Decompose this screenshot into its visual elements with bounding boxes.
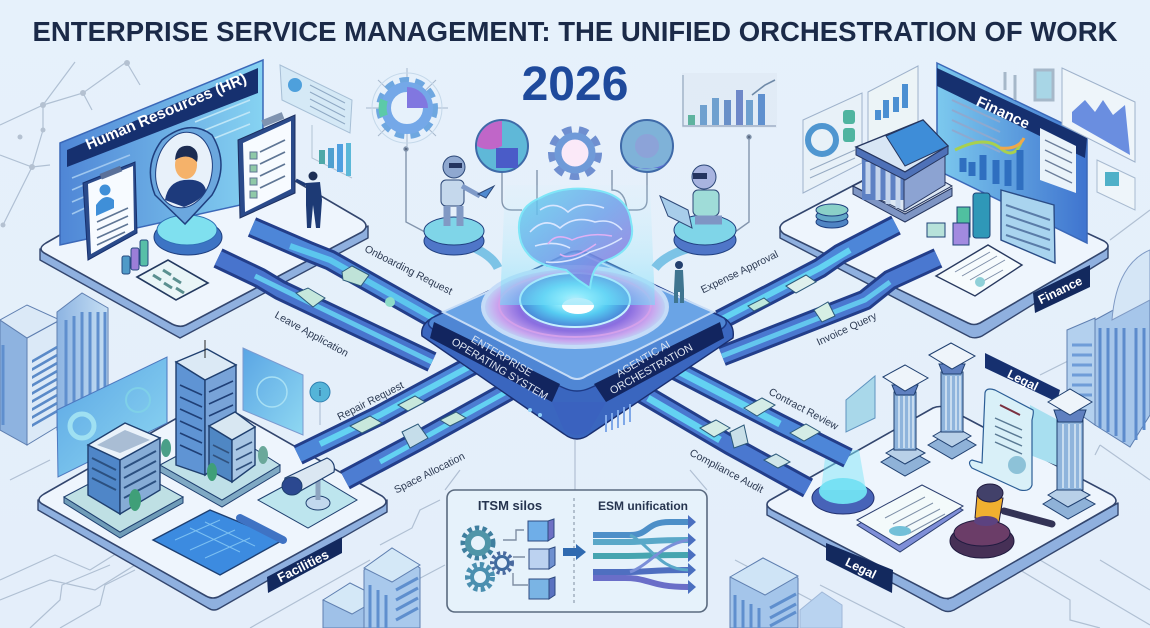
legal banner and scroll: Legal: [1005, 367, 1040, 394]
circle icon: center gear: [552, 130, 598, 176]
clipboard: candidate profile: [83, 162, 137, 260]
unification flow arrows: [593, 515, 696, 594]
pillar two: [928, 343, 976, 459]
gavel: [950, 484, 1052, 558]
HR mini chart: [312, 125, 352, 178]
pipeline: repair request: [298, 362, 478, 455]
label: invoice query: Invoice Query: [815, 310, 879, 348]
location marker: [310, 382, 330, 425]
year: 2026: [522, 58, 628, 111]
finance platform label: Finance: [1036, 274, 1085, 307]
robot left on pedestal: [424, 156, 498, 268]
bank building: [853, 120, 952, 222]
brain hologram: [519, 189, 632, 288]
legal platform label: Legal: [843, 555, 878, 582]
top gear with pie: [366, 68, 448, 148]
HR board: [60, 60, 263, 245]
robot right on pedestal: [655, 165, 736, 268]
finance board: Finance: [974, 93, 1032, 133]
facilities screen right: [243, 348, 303, 435]
coin stack: [816, 204, 848, 228]
label: contract review: Contract Review: [767, 386, 841, 433]
finance board: [937, 63, 1087, 243]
HR board: Human Resources (HR): [83, 70, 249, 154]
pipeline: leave application: [218, 258, 432, 362]
chip text right line two: ORCHESTRATION: [608, 342, 695, 397]
background buildings: left: [0, 293, 108, 445]
pipeline: onboarding request: [252, 227, 440, 322]
facilities platform label: [267, 537, 342, 593]
holographic column: [500, 185, 655, 305]
panel: finance platform: [780, 63, 1135, 338]
finance document panel: [1001, 190, 1055, 263]
tablet: [137, 260, 208, 300]
circle icon: analytics: [476, 120, 528, 172]
silo gears: [464, 529, 528, 589]
ESM heading: ESM unification: [598, 499, 688, 513]
location marker: i: [319, 387, 321, 399]
label: space allocation: Space Allocation: [392, 450, 467, 496]
panel: human resources platform: [40, 60, 368, 338]
tall office tower: [160, 340, 280, 507]
doc icon: [846, 376, 875, 432]
silo cubes: [528, 519, 555, 599]
dashed divider: [573, 498, 575, 605]
chip text right: AGENTIC AI: [614, 339, 673, 380]
pipeline: contract review: [672, 368, 848, 458]
facilities screen left: [57, 357, 167, 477]
pipeline: invoice query: [722, 258, 938, 356]
energy rings: [483, 267, 667, 347]
panel: legal platform: [767, 343, 1118, 612]
pipeline: space allocation: [345, 390, 510, 480]
mini bars: [122, 240, 148, 274]
label: leave application: Leave Application: [273, 309, 350, 360]
clipboard: checklist: [238, 112, 295, 218]
chip text left: ENTERPRISE: [469, 334, 534, 379]
3D finance bars: [927, 193, 990, 245]
top right chart: [682, 73, 777, 128]
small engineer figure: [674, 261, 684, 303]
label: onboarding request: Onboarding Request: [362, 243, 454, 298]
pipeline: compliance audit: [640, 392, 808, 488]
pillar one: [881, 365, 930, 476]
label: repair request: Repair Request: [335, 379, 406, 423]
label: compliance audit: Compliance Audit: [688, 447, 765, 496]
location pin portrait: [150, 128, 222, 255]
background buildings: bottom left: [323, 548, 420, 628]
label: expense approval: Expense Approval: [699, 248, 780, 296]
ITSM heading: ITSM silos: [478, 498, 542, 513]
holographic button: [812, 450, 874, 514]
legal document stack: [857, 485, 963, 552]
flow labels: [273, 243, 879, 496]
pipeline: expense approval: [720, 225, 896, 320]
title: ENTERPRISE SERVICE MANAGEMENT: THE UNIFIED ORCHESTRATION OF WORK: [32, 16, 1118, 47]
background buildings: bottom right: [730, 558, 842, 628]
low office block: [64, 423, 183, 538]
central operating system chip: [422, 251, 733, 439]
panel: ITSM silos to ESM unification: [447, 490, 707, 612]
finance bar chart on board: [955, 138, 1024, 190]
finance platform label: [1033, 265, 1090, 313]
background buildings: right: [1067, 250, 1150, 447]
facilities platform label: Facilities: [275, 547, 331, 585]
transition arrow: [563, 544, 586, 560]
security camera: [258, 458, 357, 528]
pillar three: [1043, 389, 1095, 519]
legal platform label: [826, 543, 893, 593]
blueprint: [153, 510, 283, 575]
finance analytics panels: [803, 66, 1135, 210]
finance contract: [936, 245, 1022, 296]
top connector lines: [404, 135, 751, 232]
legal banner and scroll: [970, 353, 1060, 490]
small HR panel: [280, 65, 352, 133]
panel: facilities platform: [38, 340, 387, 610]
circle icon: workflow: [621, 120, 673, 172]
presenter figure: [296, 172, 322, 228]
chip text left line two: OPERATING SYSTEM: [449, 336, 550, 403]
